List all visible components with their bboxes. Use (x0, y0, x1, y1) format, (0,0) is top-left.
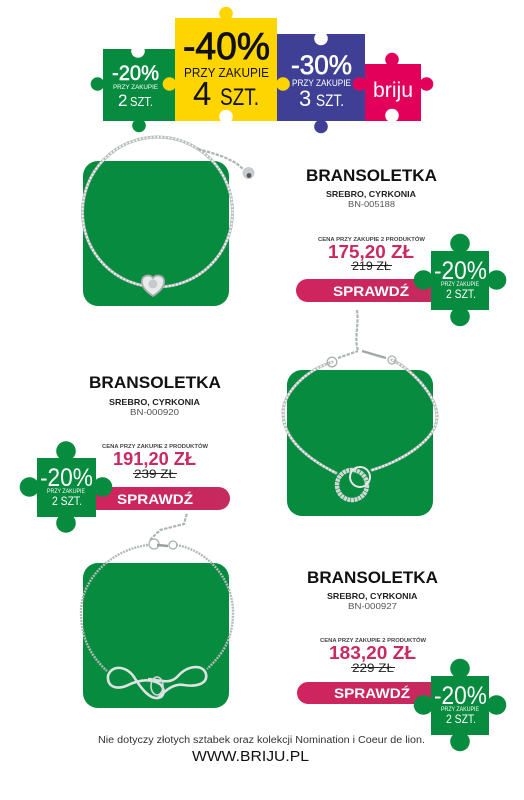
product 1 details (296, 166, 440, 302)
footer note: Nie dotyczy złotych sztabek oraz kolekcji Nomination i Coeur de lion. (98, 735, 425, 746)
button: SPRAWDŹ (117, 491, 193, 507)
material: SREBRO, CYRKONIA (326, 189, 416, 199)
discount badge 2: PRZY ZAKUPIE (47, 489, 85, 495)
material: SREBRO, CYRKONIA (327, 591, 418, 601)
product code: BN-000920 (130, 407, 179, 417)
product 2 details (89, 373, 230, 510)
button (297, 682, 440, 704)
puzzle piece: blue -30%: 3 (299, 86, 311, 111)
puzzle piece: blue -30% (275, 32, 365, 133)
price label: CENA PRZY ZAKUPIE 2 PRODUKTÓW (102, 442, 209, 450)
discounted price: 183,20 ZŁ (329, 643, 416, 663)
discount badge 3: 2 SZT. (446, 712, 476, 726)
puzzle piece: yellow -40%: SZT. (220, 84, 259, 111)
old price: 219 ZŁ (352, 259, 391, 273)
discount badge 2: -20% (40, 464, 93, 492)
puzzle piece: blue -30%: PRZY ZAKUPIE (292, 78, 351, 88)
discount badge 2: 2 SZT. (52, 494, 82, 508)
discount badge 2 (20, 441, 112, 533)
puzzle piece: yellow -40%: -40% (183, 26, 270, 68)
puzzle piece: green -20%: SZT. (130, 94, 153, 109)
puzzle piece: yellow -40% (163, 7, 277, 123)
old price: 229 ZŁ (352, 661, 394, 675)
puzzle piece: yellow -40%: PRZY ZAKUPIE (184, 65, 269, 80)
button: SPRAWDŹ (334, 685, 410, 701)
puzzle piece: green -20%: -20% (112, 62, 159, 85)
discounted price: 191,20 ZŁ (113, 449, 196, 469)
product code: BN-005188 (348, 199, 395, 209)
product code: BN-000927 (348, 601, 397, 611)
discount badge 3: PRZY ZAKUPIE (441, 707, 479, 713)
material: SREBRO, CYRKONIA (109, 397, 200, 407)
header puzzle banner (91, 7, 433, 133)
product 3 details (297, 568, 440, 704)
product 1 image: heart bracelet on green tile (82, 137, 254, 306)
website url: WWW.BRIJU.PL (192, 748, 309, 765)
product 3 image: infinity bracelet on green tile (81, 513, 233, 708)
puzzle piece: yellow -40%: 4 (193, 75, 211, 112)
puzzle piece: blue -30%: -30% (291, 50, 352, 80)
puzzle piece: green -20%: PRZY ZAKUPIE (113, 85, 158, 91)
puzzle piece: blue -30%: SZT. (316, 91, 344, 110)
puzzle piece: pink briju logo: briju (373, 79, 413, 102)
price label: CENA PRZY ZAKUPIE 2 PRODUKTÓW (318, 235, 426, 243)
discount badge 3 (414, 659, 506, 751)
puzzle piece: green -20%: 2 (118, 91, 127, 110)
product 2 image: linked circles bracelet on green tile (283, 310, 437, 516)
puzzle piece: pink briju logo (353, 53, 433, 122)
title: BRANSOLETKA (307, 568, 438, 587)
title: BRANSOLETKA (306, 166, 437, 185)
discount badge 1: -20% (434, 257, 487, 285)
discount badge 1: 2 SZT. (446, 287, 476, 301)
price label: CENA PRZY ZAKUPIE 2 PRODUKTÓW (320, 636, 427, 644)
discounted price: 175,20 ZŁ (328, 242, 414, 262)
discount badge 3: -20% (434, 682, 487, 710)
puzzle piece: green -20% (91, 44, 175, 132)
title: BRANSOLETKA (89, 373, 221, 392)
button (296, 279, 440, 302)
discount badge 1: PRZY ZAKUPIE (441, 282, 479, 288)
button (90, 487, 230, 510)
button: SPRAWDŹ (333, 283, 409, 299)
old price: 239 ZŁ (134, 467, 176, 481)
discount badge 1 (414, 234, 506, 326)
